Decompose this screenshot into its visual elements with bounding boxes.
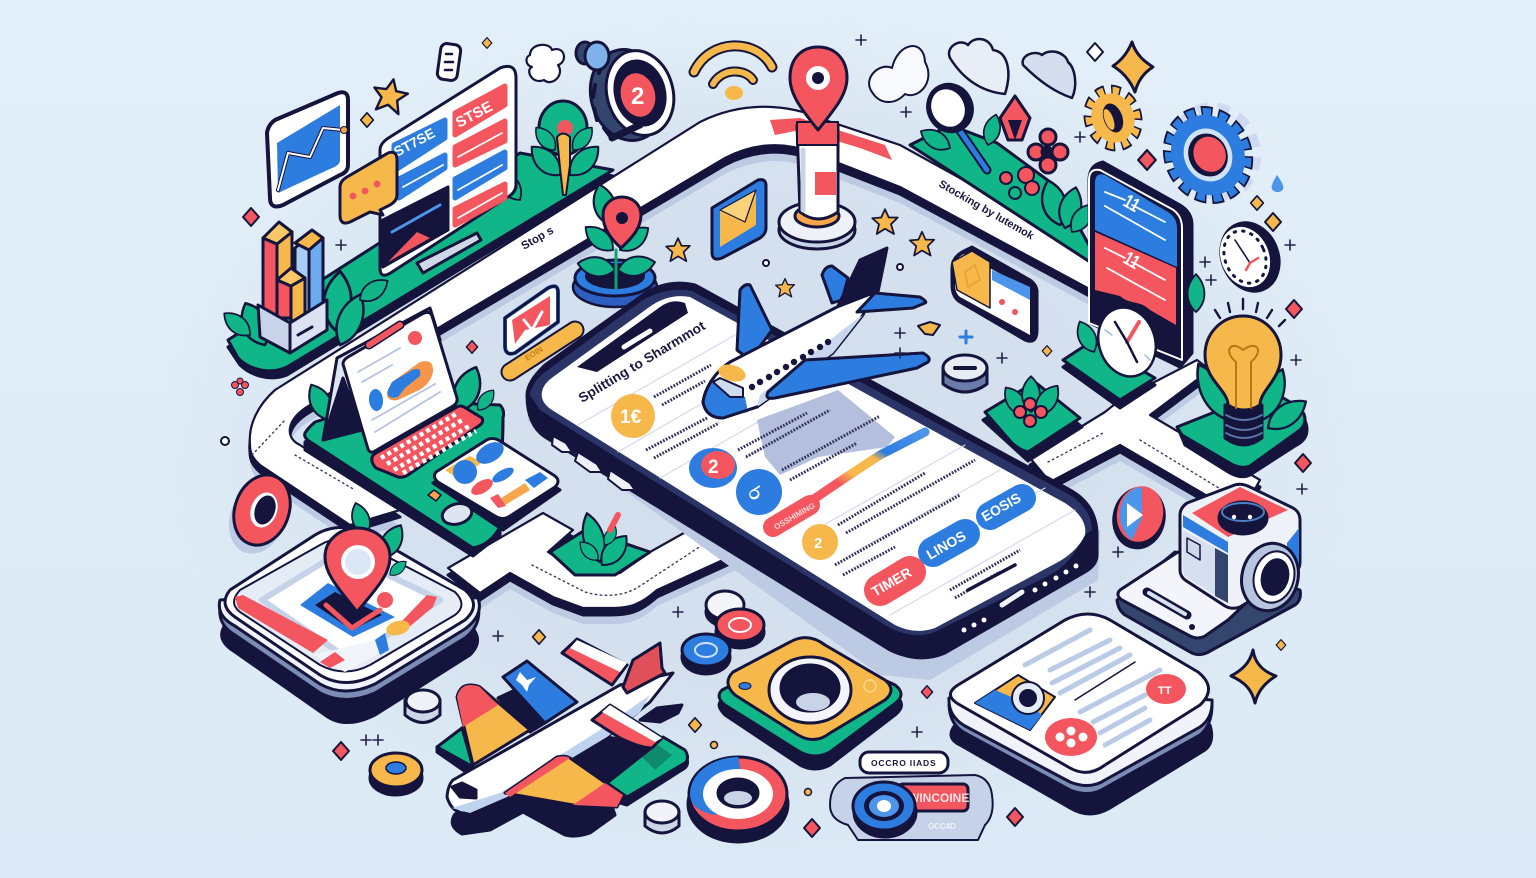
bar lines	[403, 133, 502, 218]
card photo	[975, 675, 1055, 730]
big pin	[325, 528, 390, 612]
location platform	[219, 500, 479, 722]
progress bar	[775, 432, 925, 520]
red donut	[219, 467, 300, 562]
screen dividers	[578, 335, 1075, 615]
charging port	[1002, 592, 1022, 605]
tablet back	[323, 308, 440, 440]
cockpit	[713, 378, 743, 397]
step three badge	[736, 469, 782, 515]
frame	[380, 66, 516, 275]
step one badge	[611, 394, 655, 438]
base phone	[1117, 552, 1300, 655]
blue square	[300, 583, 395, 637]
card top	[950, 614, 1209, 772]
chart card	[267, 92, 348, 206]
red bar one	[455, 86, 505, 135]
step four badge	[802, 524, 838, 560]
road shadows	[250, 123, 1260, 624]
monitor text blue: ST7SE	[391, 125, 438, 160]
road dark edge	[250, 114, 1260, 615]
small lens cylinder	[576, 42, 609, 70]
bulb screw base	[1225, 405, 1262, 445]
light bulb on platform	[1177, 299, 1312, 477]
tall bar	[263, 222, 292, 320]
location tower	[779, 47, 855, 249]
blue disc	[853, 782, 916, 837]
diamond outline	[1087, 43, 1103, 61]
cluster label	[860, 752, 948, 773]
blue sparkle	[960, 331, 972, 343]
monitor text red: STSE	[453, 98, 495, 132]
road label: stocking: Stocking by lutemok	[936, 178, 1036, 243]
small rings	[221, 260, 903, 445]
speech bubble	[340, 152, 397, 223]
small label: OCC4D	[928, 822, 956, 831]
chart box	[258, 300, 327, 353]
ground shadow	[452, 795, 615, 836]
green base left	[437, 728, 473, 767]
top lens	[1219, 502, 1267, 534]
top pin	[790, 47, 847, 130]
envelope icon	[712, 180, 766, 259]
red corner right	[400, 595, 437, 628]
cluster label: OCCRO IIADS	[871, 758, 936, 768]
fuselage	[447, 673, 673, 813]
lower plane	[437, 639, 688, 836]
wall clock	[1211, 214, 1289, 300]
document card	[949, 614, 1212, 814]
step two badge: 2	[708, 457, 719, 478]
step four badge: 2	[814, 535, 822, 552]
heart card with yellow pill	[505, 286, 575, 372]
red disc	[716, 609, 764, 648]
plants: upper left	[219, 166, 527, 350]
magnifier	[920, 77, 987, 170]
phone label blue: 11	[1120, 190, 1144, 217]
far wing	[457, 685, 530, 765]
near wing	[505, 756, 623, 807]
tablet page	[343, 312, 457, 452]
drop	[1272, 175, 1283, 192]
tablet stand	[323, 378, 362, 440]
diamonds red	[243, 150, 1311, 837]
bars	[394, 86, 505, 225]
green platform: upper left	[228, 153, 613, 378]
stars	[370, 76, 934, 297]
info card with yellow tab	[952, 247, 1037, 341]
pill label: EOIN	[523, 345, 545, 363]
step three badge: ර	[749, 483, 761, 503]
berries on platform	[1000, 167, 1039, 199]
side window	[1187, 538, 1200, 560]
small disc grey left	[405, 690, 440, 722]
blue wing	[503, 661, 577, 723]
side buttons	[552, 436, 635, 490]
heading: Splitting to Sharmmot	[576, 318, 708, 406]
nose outline	[703, 362, 757, 418]
road dotted lines	[252, 420, 1222, 595]
phone shadow	[527, 285, 1100, 680]
cockpit	[452, 783, 476, 798]
page clip	[369, 325, 400, 345]
blue bar one	[394, 120, 445, 171]
near wing	[767, 353, 929, 398]
red bar three	[455, 184, 505, 225]
back bar	[295, 230, 323, 330]
red label: WINCOINE	[908, 791, 969, 805]
dark body gap	[573, 737, 655, 783]
platform inner	[234, 539, 462, 672]
bottom strip	[313, 640, 385, 672]
small tablet card	[433, 438, 560, 530]
road arrow	[770, 118, 892, 160]
small disc grey right	[645, 801, 679, 833]
small cloud left	[526, 45, 564, 82]
plant with yellow stem	[525, 101, 605, 195]
four point stars	[1113, 42, 1276, 703]
main phone	[527, 283, 1100, 680]
mini badge	[437, 43, 461, 81]
main airplane	[703, 248, 929, 418]
cluster panel	[830, 775, 993, 840]
clouds top right	[869, 39, 1075, 102]
cloud two	[949, 39, 1008, 94]
small yellow blob on platform	[428, 490, 441, 501]
belly tint	[757, 315, 863, 407]
road network	[250, 107, 1260, 624]
tiny flower left	[232, 378, 248, 396]
phone label red: 11	[1120, 247, 1144, 274]
plant pot with pin	[573, 182, 657, 307]
gold gear	[1082, 85, 1144, 151]
wifi icon	[694, 46, 772, 100]
bulb glass	[1205, 316, 1281, 410]
green platform below tall phone	[1063, 274, 1204, 408]
plus marks	[336, 35, 1307, 745]
road plant	[550, 511, 650, 575]
small yellow blob	[918, 322, 940, 335]
plane shadow on screen	[757, 390, 895, 475]
camera on phone base	[1117, 484, 1306, 655]
platform shadow	[222, 610, 478, 722]
blue gear	[1155, 95, 1270, 211]
far wing	[737, 285, 772, 360]
red corner left	[235, 595, 328, 653]
bottom dots	[962, 564, 1078, 632]
red label	[898, 784, 969, 811]
blue screen	[1095, 174, 1177, 267]
red screen	[1095, 232, 1176, 325]
stacked discs	[682, 591, 764, 674]
stand	[417, 233, 481, 273]
card layers	[949, 690, 1212, 794]
yellow disc	[370, 753, 422, 795]
card icons	[445, 438, 548, 508]
dark screen	[383, 187, 448, 267]
red badge	[1146, 674, 1186, 704]
bulb rays	[1215, 299, 1285, 326]
side strip	[1215, 548, 1228, 603]
camera top red	[1192, 487, 1288, 537]
small pill disc	[440, 500, 474, 528]
cloud one	[869, 46, 928, 102]
red flower	[1028, 129, 1068, 173]
camera body	[1180, 484, 1300, 608]
windows	[749, 339, 831, 390]
compass clock on tall phone	[1090, 300, 1164, 384]
button store: EOSIS	[978, 489, 1024, 525]
white disc	[706, 591, 744, 626]
page pill	[368, 361, 433, 412]
green platform: upper right	[910, 125, 1090, 262]
front bar	[277, 268, 305, 325]
blue disc	[682, 634, 730, 674]
scribbled text	[646, 365, 1020, 598]
fuselage	[703, 293, 873, 418]
tail fin	[623, 643, 665, 693]
tail fin blue	[822, 266, 848, 303]
speaker	[624, 331, 650, 347]
dark center	[498, 690, 545, 732]
color donut	[688, 757, 788, 842]
card lines	[1025, 630, 1130, 693]
yellow ring platform	[719, 638, 902, 769]
plants upper right	[917, 113, 1098, 237]
phone text lines	[1105, 192, 1165, 300]
card shadow	[951, 715, 1212, 814]
road surface	[250, 107, 1260, 608]
home bar	[968, 565, 1015, 590]
button cluster	[830, 752, 993, 840]
wheel badge with number two	[580, 41, 683, 149]
tail plane	[857, 293, 926, 312]
red pill: OSSHIMING	[772, 501, 817, 532]
phone rim	[530, 290, 1092, 635]
phone screen	[542, 296, 1085, 631]
blue bar three	[455, 152, 505, 198]
red badge: TT	[1158, 685, 1172, 697]
step one badge: 1€	[620, 407, 642, 428]
step two badge	[689, 448, 737, 488]
phone body	[527, 283, 1097, 658]
fin shadow	[640, 705, 682, 722]
lower stabilizer	[592, 705, 662, 748]
rear stabilizer	[562, 639, 627, 685]
small cylinder	[943, 355, 987, 392]
platform leaves	[348, 500, 374, 538]
blue bar two	[399, 155, 445, 198]
button timer: TIMER	[868, 564, 914, 600]
tablet with keyboard	[323, 308, 483, 477]
camera blue band	[1183, 515, 1228, 553]
tail fin dark	[837, 248, 887, 308]
platform layers	[220, 600, 479, 700]
diamonds yellow	[361, 38, 1286, 732]
red gem	[1000, 96, 1030, 140]
nose cap	[716, 362, 748, 384]
platform top	[225, 528, 474, 682]
button units: LINOS	[924, 527, 969, 563]
keyboard	[372, 406, 483, 477]
bulb leaves	[1188, 359, 1238, 425]
cloud three	[1023, 51, 1075, 98]
laptop platform	[302, 363, 504, 556]
nose blue	[703, 382, 748, 418]
small berry platform	[983, 376, 1082, 461]
red circle	[1045, 718, 1097, 756]
tall phone	[1089, 162, 1192, 367]
red bar two	[455, 121, 505, 165]
road label: stop: Stop s	[520, 225, 556, 253]
monitor dashboard	[340, 66, 516, 275]
decorative stars and diamonds	[221, 35, 1311, 837]
notch	[577, 301, 688, 372]
pie disc	[1108, 482, 1170, 553]
green base right	[607, 742, 688, 805]
front lens	[1234, 537, 1306, 617]
wheel badge with number two: 2	[631, 83, 644, 110]
bulb platform	[1180, 398, 1307, 477]
left face	[1183, 530, 1228, 603]
bar chart in box	[258, 222, 327, 353]
